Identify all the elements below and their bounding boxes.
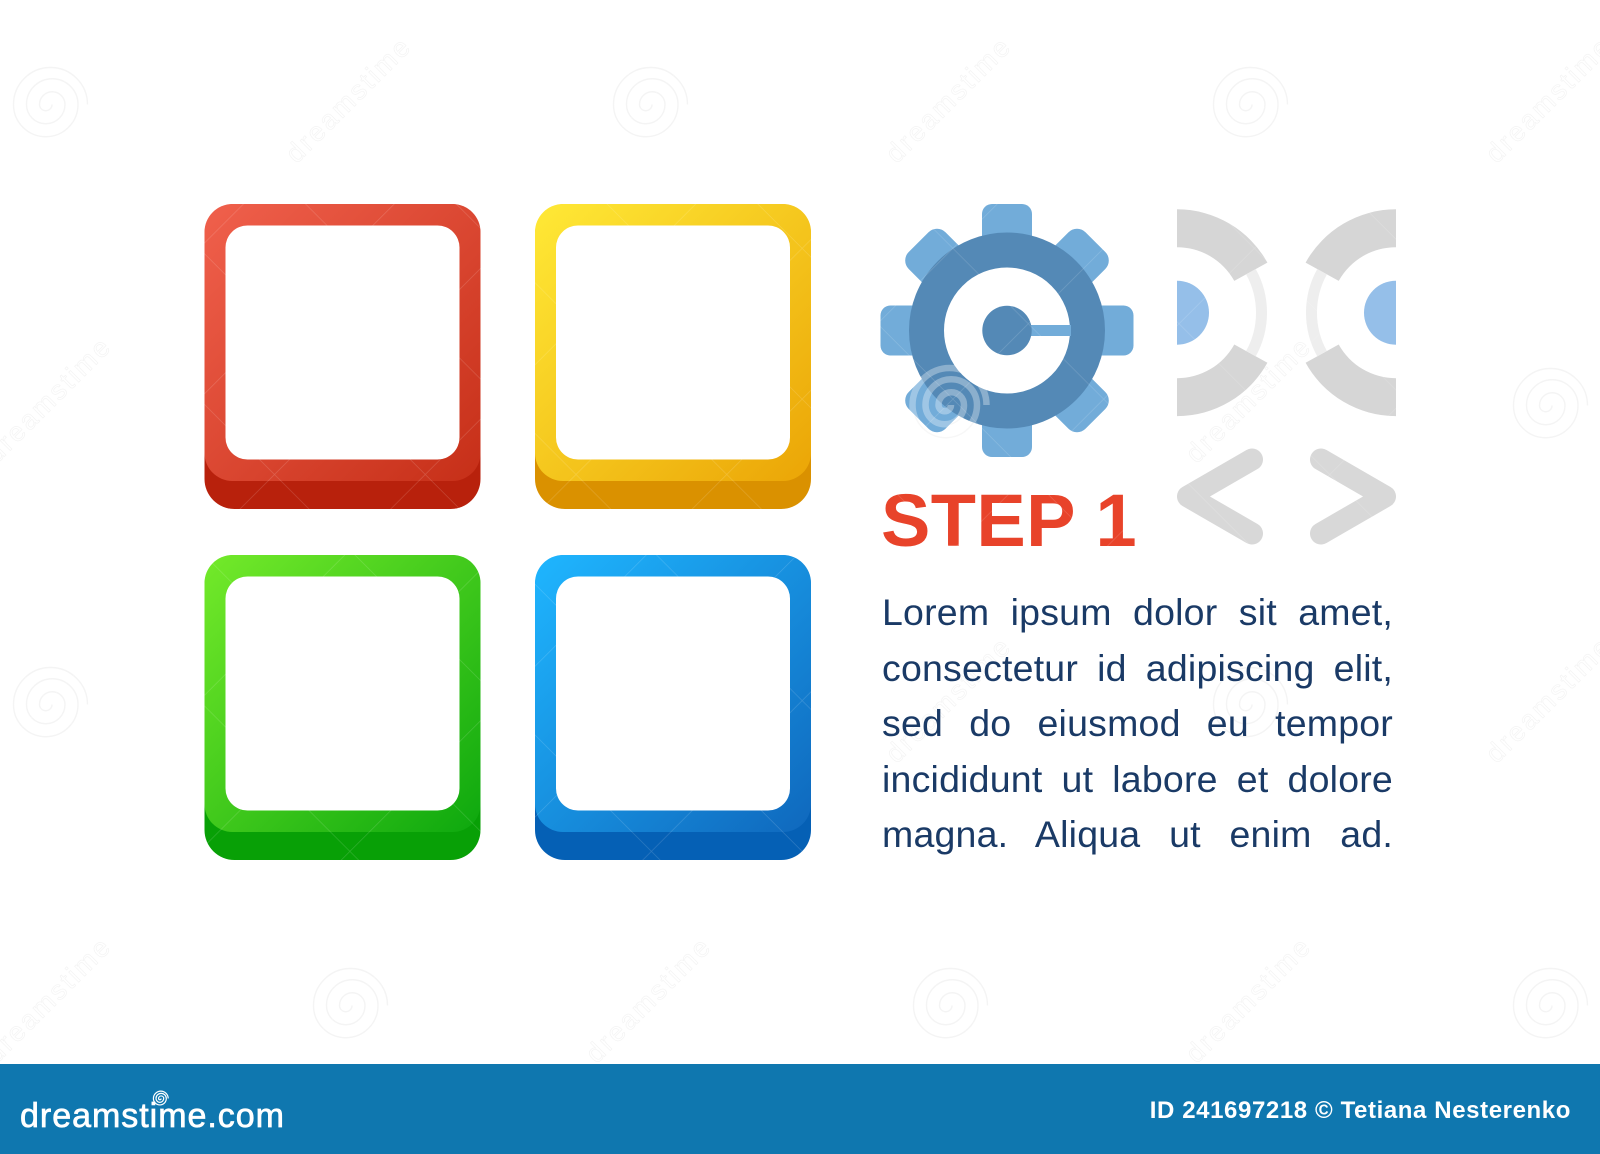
- watermark wordmarks: dreamstime: [280, 631, 418, 769]
- icon: left bracket arcs: [1177, 209, 1267, 416]
- heading: STEP 1: [881, 479, 1137, 562]
- card: yellow: [535, 204, 811, 509]
- body text: incididunt ut labore et dolore: [882, 758, 1393, 800]
- watermark wordmarks: dreamstime: [1180, 331, 1318, 469]
- body text: magna. Aliqua ut enim ad.: [882, 813, 1393, 855]
- footer credit: ID 241697218 © Tetiana Nesterenko: [1150, 1097, 1571, 1124]
- card: green: [204, 555, 480, 860]
- watermark wordmarks: dreamstime: [1180, 931, 1318, 1069]
- card: blue: [535, 555, 811, 860]
- card: red: [204, 204, 480, 509]
- body text: [882, 591, 1393, 855]
- arrow: left chevron: [1188, 460, 1252, 534]
- arrow: right chevron: [1321, 460, 1385, 534]
- icon: right bracket arcs: [1306, 209, 1396, 416]
- watermark wordmarks: dreamstime: [580, 931, 718, 1069]
- icon: gear: [880, 204, 1134, 457]
- watermark wordmarks: dreamstime: [280, 31, 418, 169]
- watermark wordmarks: dreamstime: [880, 31, 1018, 169]
- body text: consectetur id adipiscing elit,: [882, 646, 1393, 688]
- body text: sed do eiusmod eu tempor: [882, 702, 1393, 744]
- footer logo: dreamstime.com: [20, 1097, 284, 1135]
- footer bar: [0, 1064, 1600, 1154]
- body text: Lorem ipsum dolor sit amet,: [882, 591, 1393, 633]
- watermark wordmarks: dreamstime: [880, 631, 1018, 769]
- watermark spiral over gear: [912, 368, 986, 437]
- watermark wordmarks: dreamstime: [580, 331, 718, 469]
